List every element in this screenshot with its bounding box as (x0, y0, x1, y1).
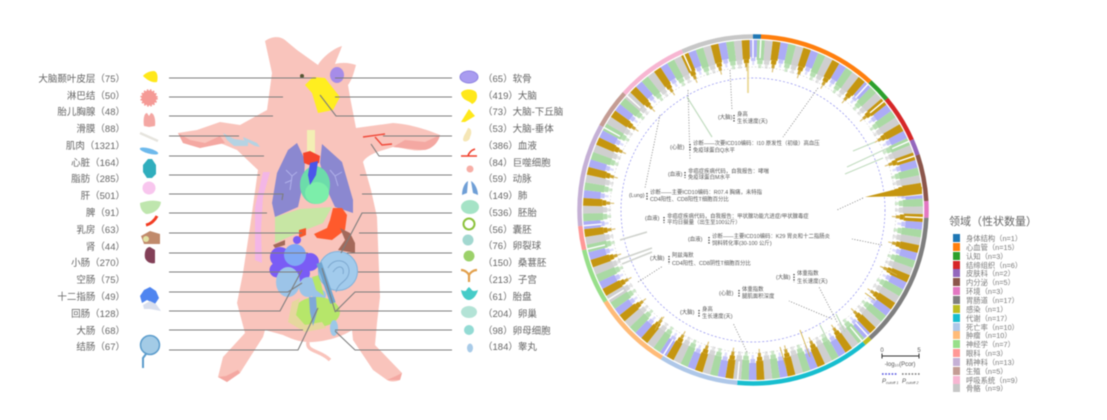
icon: lymph node (142, 90, 156, 106)
left labels: 肝（501） (81, 190, 125, 202)
left labels: 淋巴结（50） (67, 90, 125, 102)
left labels: 大肠（68） (76, 325, 125, 337)
right labels: （53）大脑-垂体 (483, 123, 554, 135)
icon: temporal cortex (143, 71, 158, 82)
legend: 生殖（n=5） (966, 367, 1008, 376)
left labels: 大脑颞叶皮层（75） (38, 73, 125, 85)
annotations: (心脏) (670, 143, 685, 151)
trait wedges (580, 36, 926, 384)
right labels: （65）软骨 (483, 73, 532, 85)
annotations: 非癌症疾病代码，自我报告：甲状腺功能亢进症/甲状腺毒症 (667, 212, 809, 220)
organ: spleen (314, 208, 347, 240)
scale bar: P (902, 379, 906, 385)
scale bar: 0 (880, 348, 884, 354)
icon: morula (464, 250, 474, 262)
icon: rectum (143, 354, 146, 368)
annotations: 非癌症疾病代码，自我报告：哮喘 (688, 167, 769, 175)
left icons (139, 71, 161, 368)
right labels (483, 73, 563, 353)
annotation bullets (647, 115, 794, 317)
icon: hypothalamus (461, 109, 475, 122)
domain gaps (592, 49, 914, 371)
organ: vena cava (308, 161, 318, 185)
cutoff circles (621, 78, 885, 342)
circular manhattan plot (580, 36, 926, 384)
right labels: （76）卵裂球 (483, 240, 542, 252)
legend title: 领域（性状数量） (949, 214, 1037, 228)
grey wedges (593, 50, 913, 370)
left labels: 结肠（67） (76, 341, 125, 353)
icon: cartilage (460, 71, 478, 83)
organ: inner ear cartilage (330, 67, 344, 83)
icon: jejunum (143, 301, 161, 311)
icon: liver (140, 201, 161, 214)
scale bar: -log₁₀(Pcor) (885, 362, 915, 368)
organ: stomach fold (328, 261, 349, 292)
annotations: (大脑) (650, 254, 665, 262)
icon: embryo (461, 200, 479, 214)
organ: arm bone and synovium (223, 133, 260, 147)
left labels: 脾（91） (86, 207, 125, 219)
right labels: （73）大脑-下丘脑 (483, 106, 563, 118)
icon: fat (142, 182, 156, 194)
pig body (178, 37, 440, 382)
annotations: (心脏) (719, 289, 734, 297)
legend: 肿瘤（n=10） (966, 331, 1012, 340)
icon: oocyte (464, 325, 474, 335)
left labels: 肌肉（1321） (66, 140, 125, 152)
organ: gallbladder (299, 228, 306, 238)
green wedges (593, 50, 913, 370)
legend: 皮肤科（n=2） (966, 269, 1015, 278)
icon: cerebrum (461, 89, 477, 104)
organ: duodenum (284, 244, 306, 266)
annotations: 身高 (702, 305, 713, 313)
big gold spike (865, 187, 922, 197)
annotations: 阿兹海默 (672, 251, 694, 259)
arm and toe shading (178, 133, 440, 382)
leader lines (169, 78, 452, 350)
icon: muscle (139, 146, 159, 156)
legend: 身体结构（n=1） (966, 234, 1022, 243)
left labels: 小肠（270） (71, 257, 125, 269)
organ: left lung (272, 143, 305, 217)
gold wedges (592, 50, 914, 370)
organ: uterus tan (288, 298, 326, 332)
annotations: 体重指数 (742, 285, 764, 293)
annotations: 平均日摄量（出生至100公斤） (667, 218, 741, 226)
annotations: (Lung) (629, 193, 645, 199)
scale bar: 5 (917, 348, 921, 354)
organ: aorta (303, 151, 320, 165)
icon: synovium bone (140, 133, 158, 141)
annotations: (血液) (645, 214, 660, 222)
significant spikes (618, 63, 897, 367)
annotations: (血液) (688, 235, 703, 243)
scale bar: P (882, 379, 886, 385)
lilac wedges (592, 48, 914, 372)
icon: pituitary (463, 128, 471, 141)
pig tail (308, 342, 330, 360)
icon: testis (467, 344, 473, 352)
legend: 感染（n=1） (966, 305, 1008, 314)
icon: artery lungs (462, 181, 478, 195)
right labels: （98）卵母细胞 (483, 325, 551, 337)
right labels: （149）肺 (483, 190, 528, 202)
annotations: 免疫球蛋白M水平 (688, 173, 731, 181)
legend: 环境（n=3） (966, 287, 1008, 296)
right labels: （150）桑葚胚 (483, 257, 547, 269)
icon: uterus (461, 270, 477, 282)
annotations: 身高 (737, 110, 748, 118)
organ: heart lower chamber (305, 182, 329, 204)
legend: 内分泌（n=5） (966, 278, 1015, 287)
annotations: CD4阳性、CD8阴性T细胞百分比 (672, 259, 751, 267)
annotations: 生长速度(天) (702, 312, 733, 320)
icon: breast center (143, 236, 149, 242)
right labels: （213）子宫 (483, 274, 537, 286)
left labels: 乳房（63） (76, 224, 125, 236)
left labels (38, 73, 125, 353)
organ: blood vessels (363, 134, 392, 145)
annotations: 诊断——次要ICD10编码：I10 原发性（初级）高血压 (693, 139, 820, 147)
left labels: 胎儿胸腺（48） (57, 106, 125, 118)
organ: small intestine (270, 236, 319, 282)
legend: 认知（n=3） (966, 252, 1008, 261)
right labels: （536）胚胎 (483, 207, 537, 219)
organ: kidney (338, 228, 355, 253)
legend: 呼吸系统（n=9） (966, 376, 1022, 385)
annotations: (大脑) (718, 113, 733, 121)
icon: macrophage (466, 166, 474, 172)
icon: thymus (144, 113, 155, 127)
scale bar: cutoff 2 (906, 381, 919, 385)
annotations: 诊断——主要ICD10编码：R07.4 胸痛，未特指 (650, 188, 763, 196)
organ: jejunum (276, 267, 326, 301)
legend: 骨骼（n=9） (966, 384, 1008, 393)
legend: 神经学（n=7） (966, 340, 1015, 349)
icon: breast (141, 231, 160, 244)
legend: 胃肠道（n=17） (966, 296, 1019, 305)
annotations: (大脑) (680, 308, 695, 316)
organ: testis (330, 320, 338, 336)
icon: blood (461, 149, 477, 156)
legend (949, 214, 1037, 393)
organ: heart (300, 166, 330, 204)
annotations: 生长速度(天) (737, 117, 768, 125)
dotted leaders (638, 70, 882, 352)
annotations: 体重指数 (797, 269, 819, 277)
legend: 死亡率（n=10） (966, 323, 1019, 332)
right labels: （56）囊胚 (483, 224, 532, 236)
left labels: 心脏（164） (71, 157, 125, 169)
left labels: 滑膜（88） (76, 123, 125, 135)
organ: trachea (307, 130, 315, 158)
pig anatomy illustration (178, 37, 440, 382)
annotations: (血液) (668, 170, 683, 178)
icon: placenta (461, 287, 478, 300)
left labels: 空肠（75） (76, 274, 125, 286)
legend: 代谢（n=17） (966, 314, 1012, 323)
legend: 心血管（n=15） (966, 243, 1019, 252)
annotations: 诊断——主要ICD10编码：K29 胃炎和十二指肠炎 (712, 232, 831, 240)
left labels: 十二指肠（49） (57, 291, 125, 303)
legend: 结缔组织（n=6） (966, 261, 1022, 270)
organ: liver (275, 207, 332, 243)
domain ring (580, 36, 926, 384)
annotations: CD4阳性、CD8阳性T细胞百分比 (650, 195, 729, 203)
organ: liver brown lobe (273, 240, 285, 248)
icon: spleen (146, 216, 157, 225)
organ: colon (309, 297, 317, 326)
icon: colon (140, 336, 160, 354)
right icons (460, 71, 479, 352)
annotations: 腿肌面积深度 (742, 292, 775, 300)
left labels: 肾（44） (86, 241, 125, 253)
icon: heart (143, 159, 156, 178)
scale bar (880, 348, 921, 385)
legend: 精神科（n=13） (966, 358, 1019, 367)
icon: ovary (461, 306, 477, 318)
organ: right lung (320, 144, 353, 213)
right labels: （59）动脉 (483, 173, 532, 185)
annotations: 免疫球蛋白Q水平 (693, 146, 736, 154)
icon: small intestine (140, 287, 159, 304)
annotations: 饲料转化率(30-100 公斤) (712, 239, 772, 247)
right labels: （61）胎盘 (483, 291, 532, 303)
icon: kidney (145, 247, 155, 263)
organ: green upper bowel (312, 275, 324, 296)
scale bar: cutoff 1 (886, 381, 898, 385)
organ: brain (305, 77, 340, 113)
right labels: （386）血液 (483, 140, 537, 152)
organ: lung bronchi (285, 170, 342, 190)
icon: blastocyst (464, 218, 474, 230)
organ: green lower bowel (294, 297, 340, 327)
right labels: （204）卵巢 (483, 308, 537, 320)
fat strip (255, 172, 270, 263)
organ: stomach (318, 252, 358, 290)
left labels: 回肠（128） (71, 308, 125, 320)
right labels: （84）巨噬细胞 (483, 157, 551, 169)
annotations: 生长速度(天) (797, 277, 828, 285)
annotations: (大脑) (776, 273, 791, 281)
right labels: （419）大脑 (483, 90, 537, 102)
eye (300, 74, 304, 78)
right labels: （184）睾丸 (483, 341, 537, 353)
organ: colon descending (319, 263, 333, 303)
left labels: 脂肪（285） (71, 173, 125, 185)
legend: 眼科（n=3） (966, 349, 1008, 358)
icon: blastomere (462, 234, 474, 246)
annotations (629, 110, 831, 320)
